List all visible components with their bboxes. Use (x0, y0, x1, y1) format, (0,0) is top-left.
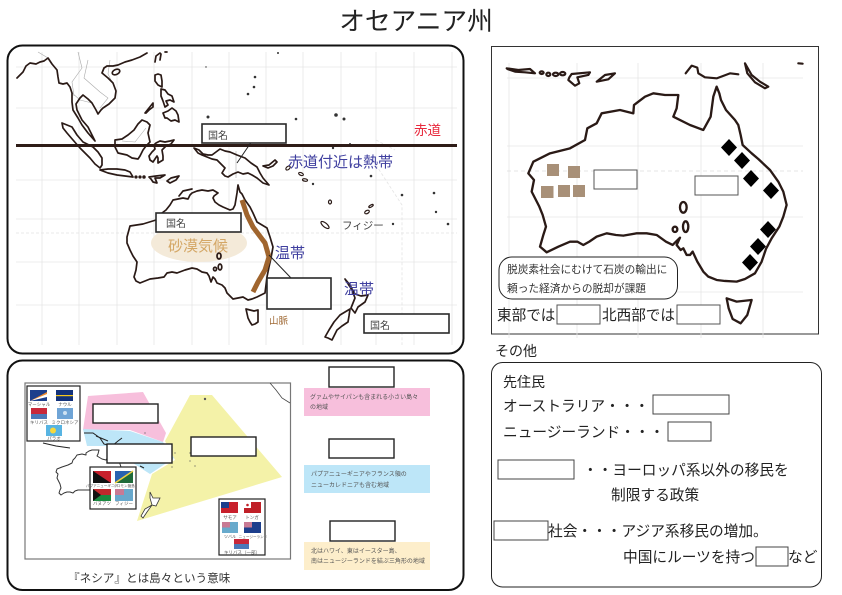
row: New Zealand indigenous (503, 422, 711, 441)
answer box: mountain range name (267, 278, 331, 309)
flags: Polynesia: ツバル (224, 534, 236, 539)
answer box: Melanesia name (329, 439, 394, 458)
region: Micronesia (83, 392, 166, 442)
fill-in sentence: east and northwest (497, 305, 720, 324)
answer box: New Zealand country name: 国名 (370, 319, 390, 332)
leader line: New Guinea (237, 141, 252, 163)
flags: Micronesia: パラオ (47, 436, 61, 442)
flags: Melanesia: ソロモン諸島 (113, 483, 135, 488)
fill-in sentence: east and northwest: 北西部では (602, 307, 675, 324)
label: temperate New Zealand: 温帯 (344, 281, 374, 298)
fill-in sentence: east and northwest: 東部では (497, 307, 555, 324)
map: New Guinea (194, 148, 277, 185)
panel: Australia resources (492, 46, 818, 338)
panel: climate map (8, 46, 464, 354)
label: mountains: 山脈 (269, 316, 289, 327)
description: Micronesia: グァムやサイパンも含まれる小さい島々 (310, 393, 418, 401)
description: Micronesia: の地域 (310, 403, 328, 411)
row: White Australia policy: ・・ヨーロッパ系以外の移民を (583, 462, 789, 479)
mountain range (242, 200, 269, 292)
coal markers (721, 139, 779, 271)
row: multicultural society: 社会・・・アジア系移民の増加。 (548, 523, 768, 540)
flags: Melanesia: フィジー (115, 501, 133, 506)
description: Melanesia: ニューカレドニアも含む地域 (311, 481, 389, 489)
answer box: Polynesia (191, 437, 256, 456)
answer box: Micronesia name (329, 367, 394, 387)
flags: Micronesia (27, 386, 80, 442)
iron ore markers (541, 164, 585, 198)
map: Pacific islands (205, 52, 449, 230)
answer box: Melanesia (107, 444, 172, 463)
description: Melanesia: パプアニューギニアやフランス領の (311, 470, 407, 478)
flags: Melanesia: バヌアツ (93, 501, 111, 507)
map: northern islands (507, 63, 803, 88)
flags: Micronesia: キリバス (30, 420, 48, 425)
flags: Polynesia: サモア (223, 515, 237, 521)
answer box: Australia country name (156, 213, 241, 232)
panel: others (492, 362, 822, 587)
label: tropical near equator: 赤道付近は熱帯 (288, 154, 393, 171)
answer box: New Guinea country name: 国名 (208, 129, 228, 142)
heading: others: その他 (495, 343, 537, 359)
flags: Polynesia: ニュージーランド (239, 534, 268, 539)
row: Australia indigenous (503, 395, 729, 415)
description: Polynesia: 北はハワイ、東はイースター島、 (311, 547, 401, 555)
description: Micronesia (304, 388, 430, 416)
mini map coastlines (43, 383, 290, 518)
row: New Zealand indigenous: ニュージーランド・・・ (503, 425, 664, 441)
region: Melanesia (83, 429, 174, 474)
callout: decarbonization (499, 257, 678, 299)
description: Polynesia: 南はニュージーランドを結ぶ三角形の地域 (311, 557, 425, 565)
answer box: iron ore (594, 170, 637, 189)
equator line (16, 144, 457, 147)
answer box: Micronesia (93, 404, 158, 423)
answer box: Polynesia name (330, 521, 395, 541)
callout: decarbonization: 頼った経済からの脱却が課題 (507, 282, 646, 295)
region: Polynesia (137, 395, 282, 521)
answer box: coal (695, 176, 738, 195)
flags: Micronesia: ナウル (58, 401, 72, 408)
leader line: mountains (269, 255, 291, 278)
map: Australia (127, 185, 273, 300)
map: Tasmania (246, 309, 258, 325)
row: White Australia policy: 制限する政策 (611, 487, 699, 504)
map: Southeast Asia (17, 52, 192, 196)
map frame (25, 383, 290, 559)
map: Australia (528, 87, 787, 282)
caption: 『ネシア』とは島々という意味 (68, 571, 231, 585)
map: Lake and gulf islands (214, 253, 222, 271)
flags: Polynesia: キリバス（一部） (224, 550, 260, 556)
answer box: New Zealand country name (364, 314, 449, 333)
map: Tasmania and gulf islands (673, 202, 752, 323)
callout: decarbonization: 脱炭素社会にむけて石炭の輸出に (507, 263, 667, 276)
label: Fiji: フィジー (342, 220, 384, 232)
row: White Australia policy (498, 460, 789, 504)
answer box: Australia country name: 国名 (166, 217, 186, 230)
flags: Polynesia: トンガ (245, 514, 259, 521)
flags: Micronesia: マーシャル (28, 402, 51, 408)
row: Australia indigenous: オーストラリア・・・ (503, 399, 649, 415)
flags: Polynesia (219, 499, 268, 556)
title: オセアニア州 (339, 8, 493, 36)
label: desert climate: 砂漠気候 (168, 238, 228, 255)
text: indigenous peoples: 先住民 (503, 374, 545, 390)
description: Melanesia (304, 465, 430, 493)
panel: Pacific regions (8, 360, 464, 590)
row: multicultural society (494, 521, 818, 566)
flags: Micronesia: ミクロネシア (52, 420, 79, 426)
label: equator: 赤道 (414, 123, 441, 138)
label: temperate Australia: 温帯 (275, 245, 305, 262)
desert climate area (151, 224, 247, 262)
row: multicultural society: 中国にルーツを持つ (623, 549, 755, 566)
answer box: New Guinea country name (202, 124, 286, 143)
flags: Melanesia (86, 467, 136, 509)
map: New Zealand (325, 279, 368, 340)
row: multicultural society: など (788, 549, 818, 566)
description: Polynesia (304, 542, 430, 570)
flags: Melanesia: パプアニューギニア (86, 483, 119, 488)
